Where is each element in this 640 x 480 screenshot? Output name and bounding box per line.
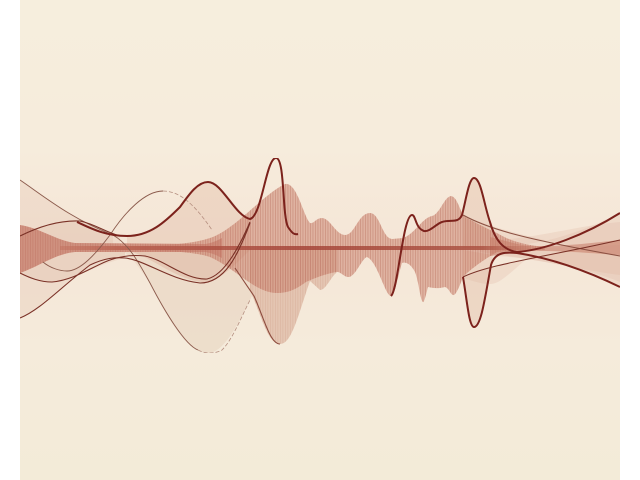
deep lower hatched lobe xyxy=(250,250,337,344)
lower left lobes under band xyxy=(125,250,250,282)
large pale descending lobe xyxy=(113,248,252,353)
dashed pale continuation curves xyxy=(163,191,250,353)
central hatched waveform body xyxy=(140,184,545,302)
soft drawing group xyxy=(20,158,620,353)
left rising lobe xyxy=(127,182,250,248)
right spike lobes xyxy=(463,178,497,248)
right red band xyxy=(490,237,620,256)
medium dark wave lines xyxy=(20,215,620,344)
central dark band xyxy=(60,246,530,250)
left translucent lobes xyxy=(20,180,125,318)
thin outline curves xyxy=(20,180,198,350)
right translucent fan xyxy=(463,213,620,287)
thick main wave line xyxy=(77,158,620,327)
left red band xyxy=(20,225,222,273)
